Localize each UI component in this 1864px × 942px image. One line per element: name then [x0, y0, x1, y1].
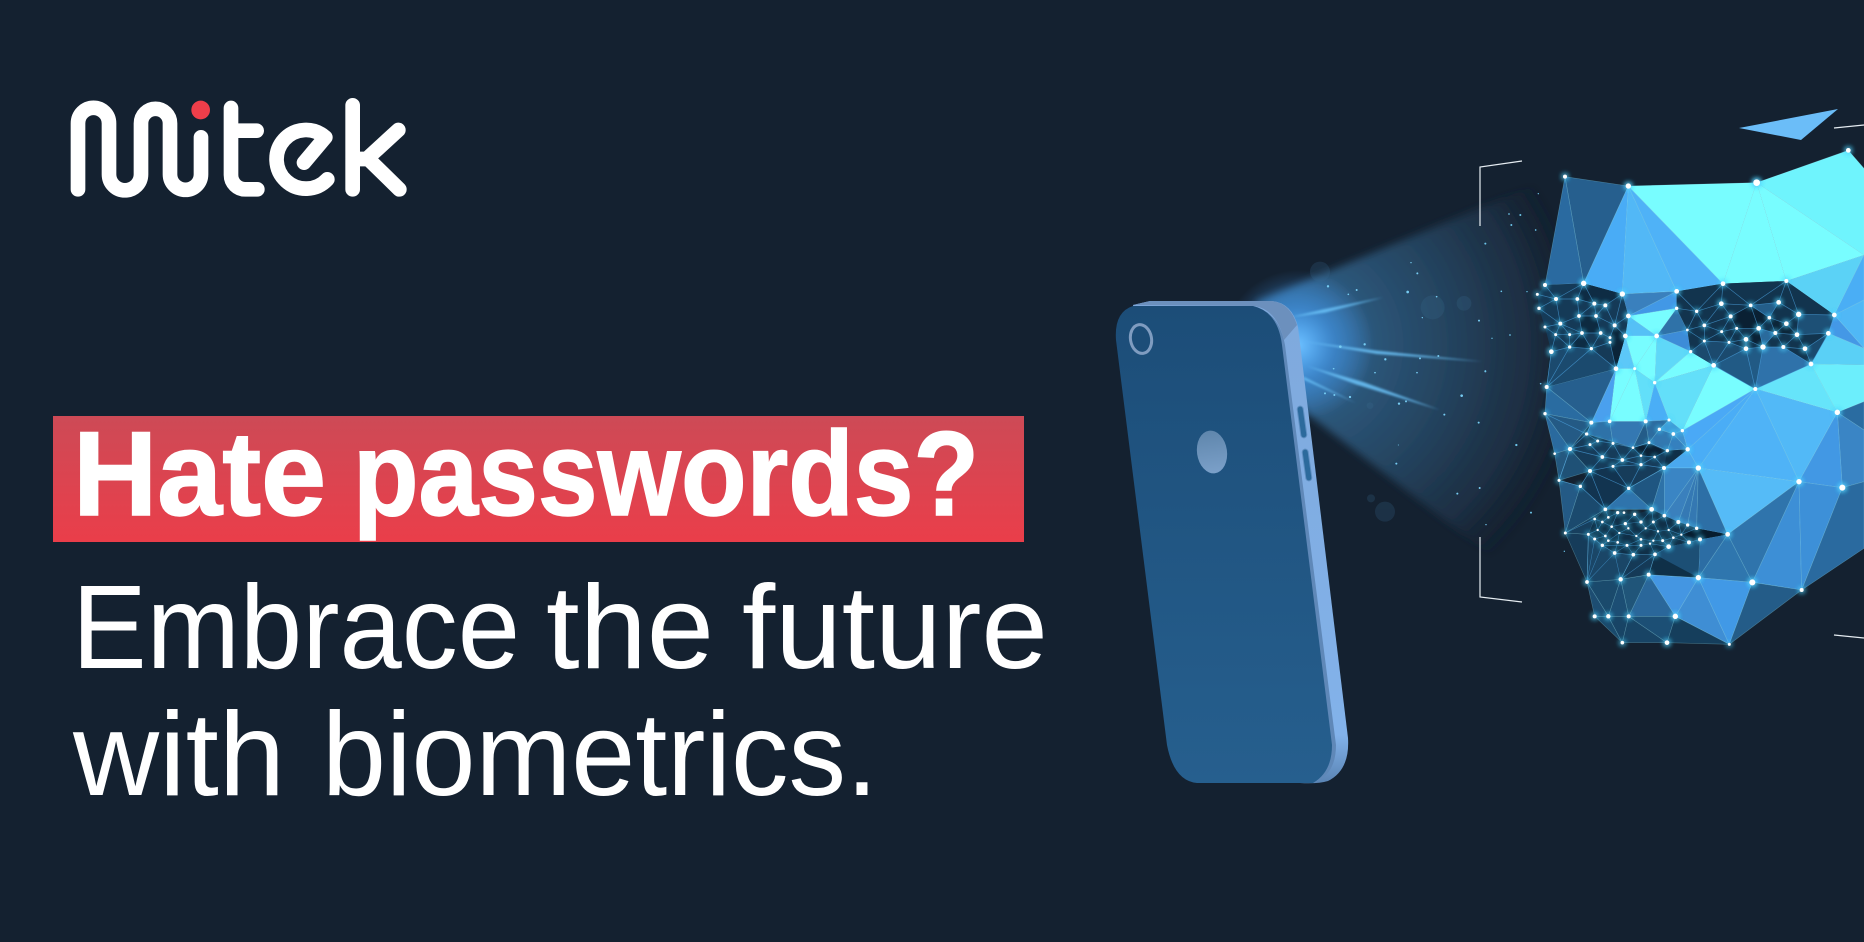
- banner text: [73, 407, 979, 541]
- subheading line 1: the: [546, 561, 714, 694]
- scan frame brackets: [1480, 125, 1864, 638]
- phone side edge: [1133, 301, 1348, 783]
- bracket bottom left: [1480, 537, 1522, 602]
- subheading line 1: future: [742, 561, 1048, 694]
- subheading line 1: [72, 561, 1048, 694]
- logo red dot: [191, 101, 210, 119]
- mouth: [1565, 509, 1728, 582]
- logo letters: [78, 105, 399, 190]
- bracket bottom right: [1834, 635, 1864, 638]
- phone back panel: [1116, 306, 1332, 783]
- bracket top left: [1480, 161, 1522, 226]
- nose shadow details: [1545, 414, 1688, 509]
- face mesh: [1484, 148, 1864, 645]
- right eye: [1677, 281, 1834, 389]
- phone inner bevel: [1253, 306, 1336, 783]
- banner text: Hate: [73, 407, 326, 541]
- side button top: [1297, 406, 1307, 438]
- banner background: [53, 416, 1024, 542]
- side button bottom: [1302, 449, 1312, 481]
- subheading line 2: [72, 688, 878, 821]
- left eye: [1537, 283, 1628, 387]
- face facets: [1545, 150, 1864, 644]
- subheading line 1: Embrace: [72, 561, 520, 694]
- beam cone: [1255, 158, 1600, 640]
- particles and rays: [1290, 262, 1487, 525]
- phone logo dot: [1194, 429, 1230, 475]
- phone top edge: [1133, 301, 1297, 340]
- beam glow: [1223, 270, 1373, 420]
- mesh vertices: [1536, 148, 1850, 645]
- logo: Mitek wordmark: [78, 101, 399, 190]
- banner text: passwords?: [353, 407, 979, 541]
- light beam from phone: [1223, 158, 1600, 640]
- phone: [1116, 301, 1348, 783]
- subheading: [72, 561, 1048, 821]
- particles behind face: [1484, 193, 1597, 588]
- camera ring: [1128, 323, 1154, 355]
- headline banner: [53, 407, 1024, 542]
- subheading line 2: with: [72, 688, 285, 821]
- blue triangle shard: [1739, 109, 1838, 140]
- bracket top right: [1834, 125, 1864, 128]
- subheading line 2: biometrics.: [322, 688, 878, 821]
